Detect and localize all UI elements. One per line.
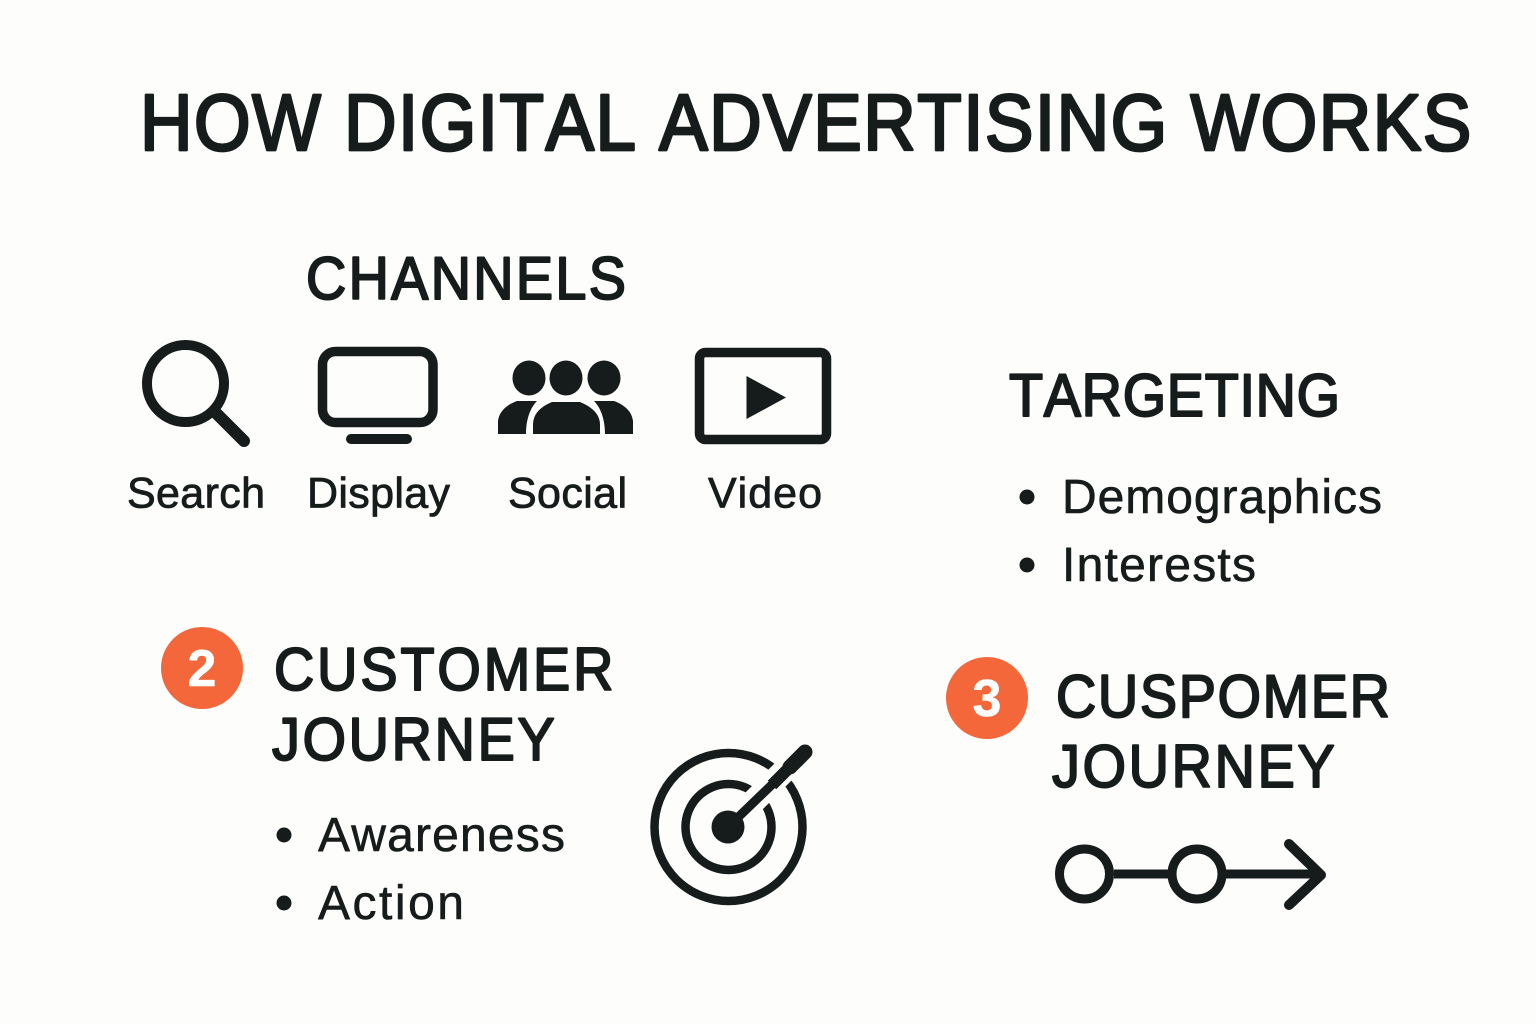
label: video: Video (708, 470, 822, 518)
icon: target with dart (654, 752, 805, 901)
panel: channels (127, 246, 826, 517)
bullet: interests: Interests (1062, 539, 1256, 592)
label: search: Search (127, 470, 265, 518)
badge: number 2 (161, 627, 243, 709)
heading: customer journey: JOURNEY (272, 707, 555, 773)
bullet: awareness: Awareness (318, 809, 565, 862)
panel: cuspomer journey (946, 657, 1390, 905)
label: display: Display (307, 470, 450, 518)
icon: journey path arrow (1060, 844, 1321, 905)
badge: number 3: 3 (973, 670, 1001, 728)
heading: targeting: TARGETING (1009, 363, 1340, 429)
bullet: action: Action (318, 877, 464, 930)
label: social: Social (508, 470, 627, 518)
heading: cuspomer journey (1052, 664, 1390, 800)
heading: customer journey (272, 637, 613, 773)
heading: channels: CHANNELS (306, 246, 626, 312)
icon: video player (700, 352, 826, 440)
heading: cuspomer journey: JOURNEY (1052, 734, 1335, 800)
panel: targeting (1009, 363, 1382, 592)
icon: search magnifier (147, 345, 244, 441)
panel: customer journey (161, 627, 805, 930)
bullet: demographics: Demographics (1062, 471, 1382, 524)
icon: display monitor (322, 352, 433, 439)
badge: number 2: 2 (188, 640, 216, 698)
title: HOW DIGITAL ADVERTISING WORKS (140, 79, 1471, 168)
heading: cuspomer journey: CUSPOMER (1056, 664, 1390, 730)
heading: customer journey: CUSTOMER (274, 637, 613, 703)
badge: number 3 (946, 657, 1028, 739)
icon: social group (498, 360, 633, 434)
